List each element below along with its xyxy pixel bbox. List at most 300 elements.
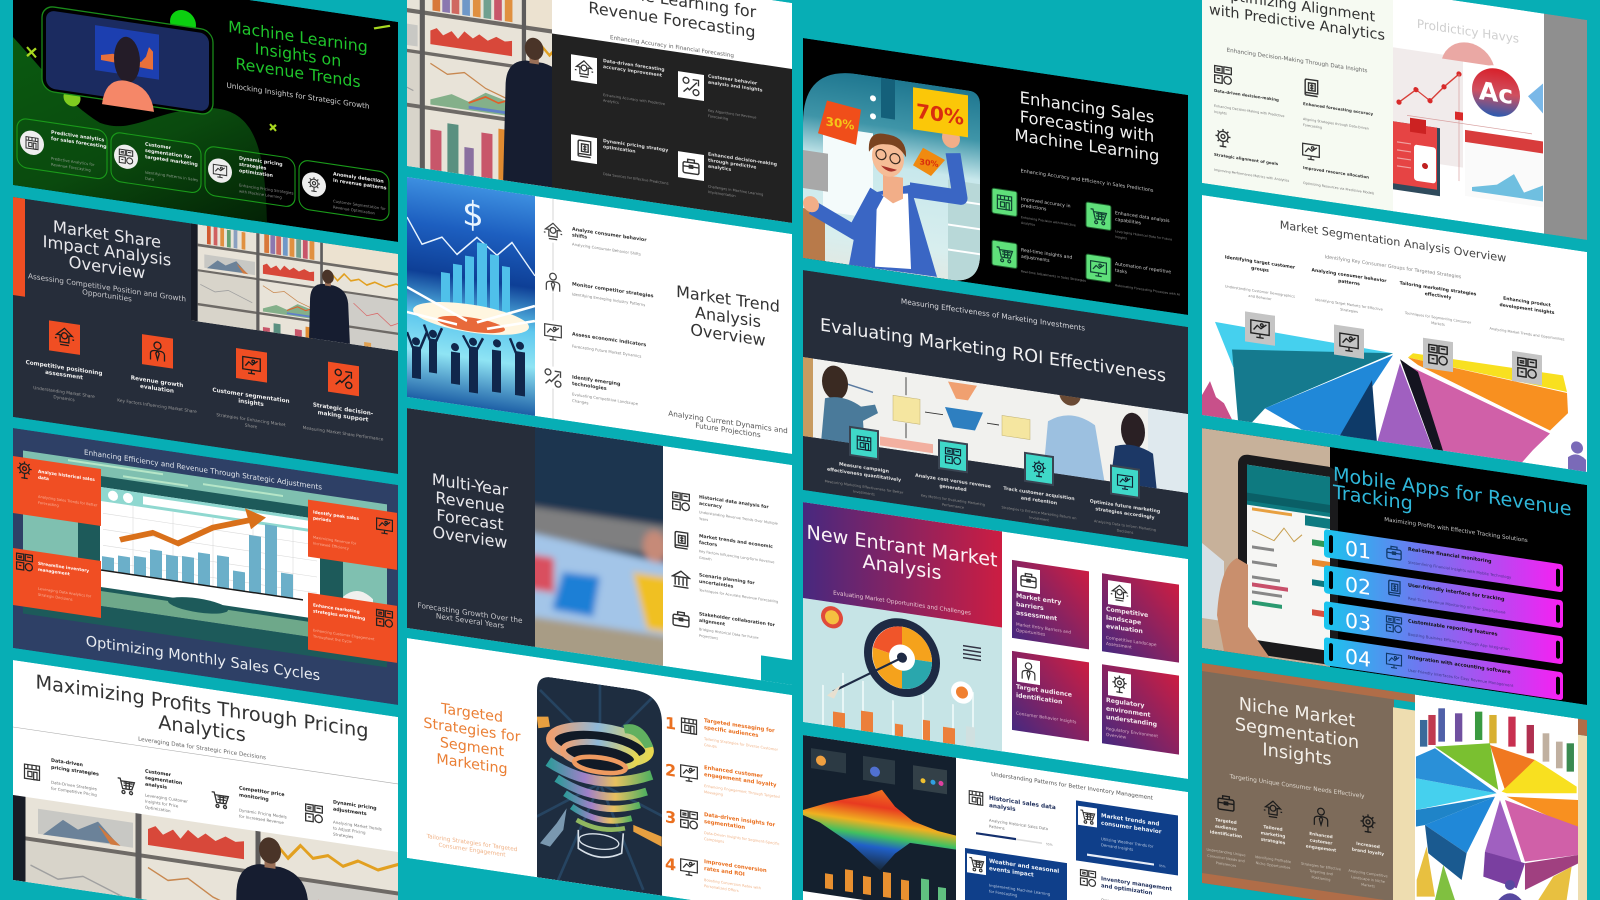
item: dynamic pricing bbox=[305, 800, 382, 838]
image: target with arrow bbox=[803, 598, 1002, 751]
panel: Optimizing Monthly Sales Cycles bbox=[13, 428, 398, 705]
item: analyze consumer behavior: shifts bbox=[572, 232, 587, 241]
item: assess economic indicators: Forecasting Future Market Dynamics bbox=[572, 343, 641, 359]
icon: lime crosses bbox=[26, 24, 390, 132]
item: increased brand loyalty: Increased bbox=[1356, 842, 1380, 850]
card: identify peak sales bbox=[308, 500, 397, 570]
bar 04: Integration with accounting software bbox=[1408, 655, 1511, 676]
item: customer behavior: analysis and insights bbox=[708, 80, 763, 94]
card: weather and seasonal: events impact bbox=[989, 866, 1034, 879]
bar 04 bbox=[1324, 637, 1563, 700]
item: analyze cost: Performance bbox=[942, 503, 964, 510]
item: stakeholder collaboration bbox=[673, 607, 776, 649]
bar 01: Streamlining Financial Insights with Mobile Technology bbox=[1408, 560, 1512, 580]
item: identifying target customer: and Behavior bbox=[1248, 294, 1272, 301]
item: tailored marketing bbox=[1255, 798, 1291, 870]
title: Optimizing Monthly Sales Cycles bbox=[86, 634, 320, 684]
item: improved resource allocation bbox=[1303, 143, 1375, 196]
card: enhance marketing: Enhancing Customer Engagement bbox=[313, 628, 374, 641]
item: enhanced forecasting: Forecasting bbox=[1303, 123, 1322, 130]
panel: Machine Learning Insights on Revenue Trends bbox=[13, 0, 398, 242]
image: exploding bar chart with silhouettes: $ bbox=[462, 193, 484, 236]
image: exploding bar chart with silhouettes bbox=[407, 177, 535, 416]
item: strategic decision-making: Measuring Market Share Performance bbox=[303, 425, 384, 443]
chart image: 3D pie bbox=[1202, 320, 1568, 471]
card: market entry barriers: Market Entry Barriers and bbox=[1016, 623, 1071, 636]
item: data-driven decision-making: Enhancing Decision-Making with Predictive bbox=[1214, 104, 1284, 118]
item: customer segmentation: Leveraging Customer bbox=[145, 793, 188, 804]
item: strategic decision-making: making support bbox=[318, 410, 369, 424]
item: automation bbox=[1086, 254, 1180, 297]
item: tailoring marketing bbox=[1400, 280, 1477, 376]
item: enhanced decision-making bbox=[678, 147, 777, 204]
title: Insights on bbox=[255, 39, 341, 71]
item: analyze consumer behavior: Analyzing Consumer Behavior Shifts bbox=[572, 241, 641, 257]
item: competitor price: Dynamic Pricing Models bbox=[239, 807, 287, 820]
title: Market Share bbox=[53, 217, 161, 252]
item: enhanced customer: Positioning bbox=[1312, 875, 1330, 882]
bar 02 bbox=[1324, 565, 1563, 628]
subtitle: Enhancing Accuracy and Efficiency in Sales Predictions bbox=[1021, 168, 1154, 194]
title: Tracking bbox=[1332, 480, 1413, 515]
item: automation: Automating Forecasting Processes with AI bbox=[1115, 283, 1180, 297]
sign: 30% red bbox=[818, 99, 861, 146]
image: excited shopper with discount signs bbox=[803, 66, 980, 312]
icon: purple figure bbox=[1568, 440, 1586, 472]
item: optimize future: Optimize future marketing bbox=[1090, 499, 1160, 515]
item 1: 1 bbox=[665, 713, 676, 734]
item: competitor price bbox=[212, 786, 286, 824]
item: customer segmentation: analysis bbox=[145, 782, 167, 791]
title panel: Analysis bbox=[862, 550, 942, 584]
item 4: 4 bbox=[665, 854, 676, 875]
card: market trends: 85% bbox=[1159, 864, 1166, 869]
item 3: 3 bbox=[665, 807, 676, 828]
card: dynamic pricing bbox=[205, 145, 295, 208]
item 4: rates and ROI bbox=[704, 866, 745, 878]
item: track customer bbox=[1001, 448, 1077, 526]
item: historical data: Years bbox=[699, 517, 708, 522]
card: identify peak sales: Maximizing Revenue for bbox=[313, 535, 356, 546]
card: target audience: identification bbox=[1016, 692, 1062, 706]
bar 01 bbox=[1324, 529, 1563, 592]
item: strategic alignment: Strategic alignment of goals bbox=[1214, 152, 1279, 166]
item: increased brand loyalty: Landscape in Niche bbox=[1351, 875, 1385, 884]
title: Marketing bbox=[436, 751, 508, 778]
card: market entry barriers bbox=[1012, 560, 1089, 649]
item: data-driven pricing: pricing strategies bbox=[51, 765, 99, 778]
item: enhancing product development bbox=[1490, 294, 1565, 389]
item: data-driven pricing bbox=[24, 758, 99, 797]
image: colourful pie with figures bbox=[1415, 694, 1578, 900]
item: measure campaign bbox=[825, 422, 904, 501]
item: historical data: Understanding Revenue Trends Over Multiple bbox=[699, 510, 778, 526]
item: revenue growth: Key Factors Influencing Market Share bbox=[117, 397, 197, 415]
item 4: Improved conversion bbox=[704, 859, 767, 874]
card: dynamic pricing: optimization bbox=[239, 168, 273, 179]
item 4: Boosting Conversion Rates with bbox=[704, 878, 761, 890]
subtitle: Future Projections bbox=[695, 421, 761, 439]
image: dashboard wall and analyst bbox=[407, 0, 552, 188]
panel: Market Trend Analysis Overview bbox=[407, 177, 792, 454]
item: stakeholder collaboration: Projections bbox=[699, 634, 718, 641]
item: assess economic indicators bbox=[543, 319, 646, 359]
bar 04: User-Friendly Interfaces for Easy Revenue Management bbox=[1408, 668, 1514, 688]
card: inventory management: and optimization bbox=[1101, 883, 1152, 897]
card: anomaly detection: Anomaly detection bbox=[333, 172, 384, 185]
card: historical sales data bbox=[969, 791, 1056, 847]
card: market trends: Demand Insights bbox=[1101, 842, 1133, 852]
item: analyze consumer behavior bbox=[543, 219, 647, 258]
panel: Multi-Year Revenue Forecast Overview bbox=[407, 398, 792, 695]
item: monitor competitor: Identifying Emerging Industry Patterns bbox=[572, 291, 645, 307]
item: tailored marketing: strategies bbox=[1261, 837, 1286, 846]
subtitle: Enhancing Decision-Making Through Data Insights bbox=[1227, 48, 1367, 74]
panel: Maximizing Profits Through Pricing Analytics bbox=[13, 660, 423, 900]
item 1: Targeted messaging for bbox=[704, 718, 775, 734]
item: stakeholder collaboration: Bridging Historical Data for Future bbox=[699, 627, 759, 640]
subtitle: Enhancing Accuracy in Financial Forecasting bbox=[610, 35, 734, 59]
card: dynamic pricing: Dynamic pricing bbox=[239, 156, 283, 168]
item: enhanced customer: Enhanced bbox=[1309, 832, 1333, 840]
card: customer segmentation bbox=[111, 132, 201, 194]
item: analyzing consumer behavior: patterns bbox=[1338, 278, 1360, 287]
subtitle: Opportunities bbox=[82, 287, 132, 304]
item: enhanced customer: customer bbox=[1310, 837, 1333, 847]
item: enhanced forecasting: Enhanced forecasting accuracy bbox=[1303, 101, 1374, 116]
item: competitive positioning: assessment bbox=[45, 370, 83, 381]
card: competitive landscape: Competitive Landscape bbox=[1106, 636, 1156, 648]
item: competitive positioning: Understanding Market Share bbox=[33, 386, 95, 400]
title: Overview bbox=[690, 320, 766, 350]
item 4: Personalized Offers bbox=[704, 884, 739, 893]
card: historical sales data: 55% bbox=[1046, 842, 1053, 847]
item: customer segmentation: Customer bbox=[145, 770, 171, 778]
sign: 30% small bbox=[913, 146, 945, 178]
item: market trends: Market trends and economic bbox=[699, 534, 773, 550]
item: scenario planning: uncertainties bbox=[699, 579, 734, 590]
card: dynamic pricing: strategies bbox=[239, 162, 267, 172]
item: identifying target customer: groups bbox=[1251, 265, 1269, 274]
item: enhanced forecasting bbox=[1303, 79, 1374, 137]
card: target audience bbox=[1012, 651, 1089, 741]
card: market trends: Market trends and bbox=[1101, 813, 1159, 828]
card: dynamic pricing: Enhancing Pricing Strategies bbox=[239, 182, 293, 195]
item: market trends: factors bbox=[699, 540, 717, 548]
item 3: Data-Driven Insights for Segment-Specific bbox=[704, 831, 780, 846]
item: dynamic pricing: optimization bbox=[603, 144, 635, 155]
item: identify emerging technologies: Identify emerging bbox=[572, 375, 620, 388]
item: competitor price: Competitor price bbox=[239, 786, 285, 798]
item 4 bbox=[665, 853, 767, 897]
card: streamline inventory: Streamline inventory bbox=[38, 562, 89, 574]
bar 04: 04 bbox=[1345, 644, 1371, 672]
card: historical sales data: Patterns bbox=[989, 824, 1005, 831]
subtitle: Maximizing Profits with Effective Tracking Solutions bbox=[1384, 517, 1528, 544]
title: Analytics bbox=[158, 711, 246, 746]
item: automation: tasks bbox=[1115, 268, 1128, 276]
item: enhanced data analysis: Enhanced data analysis bbox=[1115, 211, 1169, 224]
card: predictive analytics: Predictive analytics bbox=[51, 131, 104, 143]
item: track customer: Track customer acquisition bbox=[1003, 487, 1075, 502]
card: regulatory environment: Regulatory bbox=[1106, 697, 1144, 710]
title: Segmentation bbox=[1235, 714, 1359, 753]
item: tailored marketing: Identifying Profitable bbox=[1255, 855, 1291, 864]
card: regulatory environment: Overview bbox=[1106, 732, 1127, 741]
card: anomaly detection: Customer Segmentation for bbox=[333, 198, 386, 211]
item: data-driven forecasting: Enhancing Accuracy with Predictive bbox=[603, 93, 665, 106]
item: analyzing consumer behavior: Strategies bbox=[1340, 307, 1358, 314]
item: customer behavior: Customer behavior bbox=[708, 75, 757, 87]
image: blurred tablet bbox=[535, 427, 663, 666]
item: stakeholder collaboration: alignment bbox=[699, 618, 726, 628]
item: identify emerging technologies: Changes bbox=[572, 398, 589, 405]
item: revenue growth: Revenue growth bbox=[131, 375, 183, 389]
item: optimize future bbox=[1090, 461, 1160, 539]
item: targeted audience: identification bbox=[1210, 829, 1242, 840]
card: predictive analytics: for sales forecasting bbox=[51, 136, 107, 150]
card: enhance marketing: strategies and timing bbox=[313, 608, 365, 622]
item: optimize future: strategies accordingly bbox=[1095, 506, 1155, 521]
item: scenario planning: Techniques for Accurate Revenue Forecasting bbox=[698, 588, 778, 604]
item 3 bbox=[665, 806, 780, 852]
title: Overview bbox=[69, 252, 145, 283]
card: predictive analytics bbox=[17, 118, 107, 180]
image: laptop with bar chart bbox=[23, 450, 387, 667]
card: analyze historical sales bbox=[13, 456, 101, 526]
bar 02: User-friendly interface for tracking bbox=[1408, 583, 1505, 603]
item: analyze cost: Analyze cost versus revenue bbox=[915, 474, 991, 490]
subtitle: Analyzing Current Dynamics and bbox=[668, 409, 788, 435]
card: enhance marketing bbox=[308, 593, 397, 663]
card: competitive landscape: Assessment bbox=[1106, 641, 1132, 651]
card: competitive landscape: evaluation bbox=[1106, 623, 1143, 635]
item 1: specific audiences bbox=[704, 725, 758, 739]
panel: Optimizing Alignment with Predictive Analytics bbox=[1202, 0, 1587, 240]
card: anomaly detection: Revenue Optimization bbox=[333, 204, 376, 216]
card: historical sales data: Historical sales data bbox=[989, 796, 1056, 811]
card: streamline inventory bbox=[13, 548, 101, 618]
title: Strategies for bbox=[423, 715, 521, 746]
item: strategic decision-making bbox=[303, 358, 384, 443]
item: improved resource allocation: Optimizing Resources via Predictive Models bbox=[1303, 181, 1375, 196]
card: customer segmentation: Data bbox=[145, 176, 154, 182]
item: increased brand loyalty: Markets bbox=[1361, 883, 1375, 889]
item: identify emerging technologies bbox=[543, 365, 639, 413]
item: revenue growth bbox=[117, 330, 197, 415]
card: anomaly detection bbox=[299, 159, 389, 222]
card: customer segmentation: Customer bbox=[145, 143, 171, 151]
item: track customer: Investment bbox=[1029, 515, 1049, 522]
item: improved accuracy: Analytics bbox=[1021, 221, 1035, 227]
card: weather and seasonal: for Forecasting bbox=[989, 889, 1018, 898]
title: Analysis bbox=[695, 303, 761, 331]
item: dynamic pricing: Data Sources for Effective Predictions bbox=[603, 172, 669, 186]
title: Enhancing Sales bbox=[1020, 88, 1154, 127]
item: targeted audience: Preferences bbox=[1216, 861, 1236, 868]
item: strategic alignment bbox=[1214, 128, 1290, 183]
item: optimize future: Analyzing Data to Inform Marketing bbox=[1094, 519, 1156, 532]
item: data-driven pricing: for Competitive Pricing bbox=[51, 786, 97, 797]
card: dynamic pricing: with Machine Learning bbox=[239, 188, 282, 200]
item: historical data: Historical data analysis for bbox=[699, 495, 769, 511]
item: increased brand loyalty: Analyzing Competitive bbox=[1348, 869, 1388, 878]
item: customer segmentation: Strategies for Enhancing Market bbox=[216, 413, 286, 428]
card: enhance marketing: Enhance marketing bbox=[313, 603, 360, 615]
item: analyzing consumer behavior: Identifying Target Markets for Effective bbox=[1315, 298, 1383, 312]
card: anomaly detection: in revenue patterns bbox=[333, 178, 387, 192]
card: regulatory environment: Regulatory Environment bbox=[1106, 727, 1158, 740]
card: competitive landscape: landscape bbox=[1106, 614, 1141, 627]
bar 02: Real-Time Revenue Monitoring on Your Smartphone bbox=[1408, 596, 1506, 615]
item: dynamic pricing bbox=[571, 133, 669, 186]
card: target audience: Consumer Behavior Insights bbox=[1016, 711, 1077, 726]
sign: 70% bbox=[913, 87, 968, 137]
subtitle: Measuring Effectiveness of Marketing Investments bbox=[901, 297, 1085, 333]
item: identifying target customer: Identifying target customer bbox=[1225, 255, 1295, 271]
bar 01: Real-time financial monitoring bbox=[1408, 547, 1492, 565]
item: strategic decision-making: Strategic decision- bbox=[313, 402, 373, 417]
item: data-driven forecasting: Analytics bbox=[603, 99, 619, 105]
item: identifying target customer: Understanding Customer Demographics bbox=[1225, 284, 1295, 299]
subtitle: Consumer Engagement bbox=[438, 843, 506, 859]
subtitle: Forecasting Growth Over the bbox=[418, 601, 522, 625]
item: dynamic pricing: to Adjust Pricing bbox=[333, 825, 366, 835]
title: Maximizing Profits Through Pricing bbox=[35, 670, 369, 743]
item: tailored marketing: Tailored bbox=[1263, 825, 1283, 833]
card: analyze historical sales: Analyzing Sales Trends for Better bbox=[38, 495, 97, 507]
card: identify peak sales: Identify peak sales bbox=[313, 510, 359, 522]
item: customer behavior: Key Algorithms for Revenue bbox=[708, 109, 756, 120]
subtitle: Understanding Patterns for Better Inventory Management bbox=[991, 772, 1154, 802]
item: customer segmentation: Insights for Price bbox=[145, 799, 179, 809]
title: Forecasting with bbox=[1020, 107, 1154, 146]
card: market entry barriers: barriers bbox=[1016, 601, 1044, 612]
card: analyze historical sales: Analyze historical sales bbox=[38, 470, 95, 483]
item: real-time insights: Real-time insights and bbox=[1021, 248, 1072, 261]
item 2: Messaging bbox=[704, 790, 723, 797]
item: competitive positioning bbox=[26, 320, 102, 402]
item: analyze consumer behavior: Analyze consumer behavior bbox=[572, 227, 647, 243]
item: historical data bbox=[673, 490, 778, 532]
card: streamline inventory: Leveraging Data Analytics for bbox=[38, 587, 91, 599]
item: tailoring marketing: Markets bbox=[1431, 321, 1445, 327]
item: enhanced data analysis: capabilities bbox=[1115, 217, 1142, 227]
title: Mobile Apps for Revenue bbox=[1333, 462, 1572, 521]
item: enhancing product development: Analyzing Market Trends and Opportunities bbox=[1490, 327, 1565, 342]
item: improved resource allocation: Improved resource allocation bbox=[1303, 165, 1369, 180]
item: improved accuracy: Improved accuracy in bbox=[1021, 197, 1071, 210]
item: customer segmentation: Share bbox=[245, 423, 258, 430]
item: enhanced data analysis: Leveraging Historical Data for Future bbox=[1115, 229, 1172, 242]
subtitle: Leveraging Data for Strategic Price Decisions bbox=[138, 737, 266, 761]
item: measure campaign: effectiveness quantitatively bbox=[827, 467, 901, 483]
card: streamline inventory: management bbox=[38, 567, 70, 577]
item: data-driven decision-making: Insights bbox=[1214, 110, 1227, 116]
item 1: Groups bbox=[704, 743, 717, 749]
panel: Enhancing Sales Forecasting with Machine Learning bbox=[803, 38, 1188, 343]
item 2: Enhancing Engagement Through Targeted bbox=[704, 784, 780, 799]
card: competitive landscape: Competitive bbox=[1106, 606, 1148, 619]
image: red predictive analytics illustration: Proldicticy Havys bbox=[1417, 17, 1519, 46]
item: customer segmentation: Customer segmentation bbox=[212, 388, 290, 405]
title: Machine Learning bbox=[1015, 125, 1159, 166]
item: increased brand loyalty: brand loyalty bbox=[1352, 847, 1384, 857]
title: Revenue bbox=[435, 488, 505, 517]
item: analyze cost: Key Metrics for Evaluating Marketing bbox=[921, 493, 985, 507]
title panel: New Entrant Market bbox=[806, 521, 998, 572]
item: improved accuracy: predictions bbox=[1021, 203, 1047, 213]
panel: Mobile Apps for Revenue Tracking bbox=[1202, 428, 1587, 705]
sign: 70%: 70% bbox=[916, 99, 964, 130]
item 1: Tailoring Strategies for Diverse Customer bbox=[704, 737, 778, 752]
item: enhanced decision-making: analytics bbox=[708, 164, 731, 173]
item: data-driven pricing: Data-Driven Strategies bbox=[51, 780, 97, 791]
item: enhanced customer: Targeting and bbox=[1308, 869, 1333, 876]
item: customer segmentation: Optimization bbox=[145, 805, 171, 813]
item 2 bbox=[665, 759, 780, 805]
image: phone in hand bbox=[1202, 428, 1338, 668]
bar 01: 01 bbox=[1345, 536, 1371, 564]
bar 03 bbox=[1324, 601, 1563, 664]
image: team at whiteboard bbox=[803, 357, 1188, 493]
icon: green circles bbox=[64, 10, 196, 106]
title: Insights bbox=[1262, 739, 1332, 770]
card: historical sales data: analysis bbox=[989, 803, 1016, 813]
item: real-time insights bbox=[992, 240, 1086, 283]
item: data-driven forecasting: accuracy improvement bbox=[603, 64, 663, 79]
item: tailoring marketing: effectively bbox=[1425, 291, 1451, 301]
item: dynamic pricing: Dynamic pricing strategy bbox=[603, 139, 668, 154]
item: real-time insights: adjustments bbox=[1021, 254, 1050, 264]
card: identify peak sales: Increased Efficiency bbox=[313, 541, 350, 551]
title panel: Evaluating Market Opportunities and Challenges bbox=[833, 590, 971, 617]
item: improved accuracy bbox=[992, 188, 1076, 233]
item: identify emerging technologies: Evaluating Competitive Landscape bbox=[572, 391, 638, 406]
title panel bbox=[803, 502, 1002, 627]
item 3: segmentation bbox=[704, 819, 745, 831]
item: tailoring marketing: Techniques for Segmenting Consumer bbox=[1405, 311, 1471, 325]
card: market entry barriers: assessment bbox=[1016, 610, 1057, 623]
item 3: Campaigns bbox=[704, 837, 724, 844]
item: competitor price: for Increased Revenue bbox=[239, 813, 284, 825]
item: increased brand loyalty bbox=[1348, 811, 1388, 890]
image: woman at monitor bbox=[42, 5, 213, 121]
item: enhanced decision-making: through predictive bbox=[708, 158, 756, 171]
item: optimize future: Decisions bbox=[1117, 528, 1133, 535]
card: weather and seasonal: Weather and seasonal bbox=[989, 859, 1059, 875]
item: enhanced data analysis: Insights bbox=[1115, 235, 1127, 241]
item: competitive positioning: Dynamics bbox=[53, 394, 75, 403]
item: targeted audience bbox=[1206, 793, 1246, 869]
item: customer behavior bbox=[678, 71, 762, 121]
item: analyze cost bbox=[915, 436, 991, 514]
item: competitive positioning: Competitive positioning bbox=[26, 360, 102, 377]
item: enhanced customer: engagement bbox=[1306, 843, 1336, 854]
item: dynamic pricing: Analyzing Market Trends bbox=[333, 819, 382, 832]
card: regulatory environment bbox=[1102, 664, 1179, 755]
item: improved accuracy: Enhancing Precision with Predictive bbox=[1021, 215, 1076, 227]
item: dynamic pricing: adjustments bbox=[333, 806, 367, 817]
card: regulatory environment: environment bbox=[1106, 705, 1150, 719]
title: Overview bbox=[433, 522, 507, 552]
item: market trends bbox=[675, 530, 774, 571]
item: data-driven forecasting: Data-driven forecasting bbox=[603, 59, 665, 73]
card: enhance marketing: Throughout the Cycle bbox=[312, 634, 353, 644]
item: analyze cost: generated bbox=[939, 483, 967, 493]
card: weather and seasonal bbox=[965, 848, 1067, 900]
item 1 bbox=[665, 712, 778, 758]
